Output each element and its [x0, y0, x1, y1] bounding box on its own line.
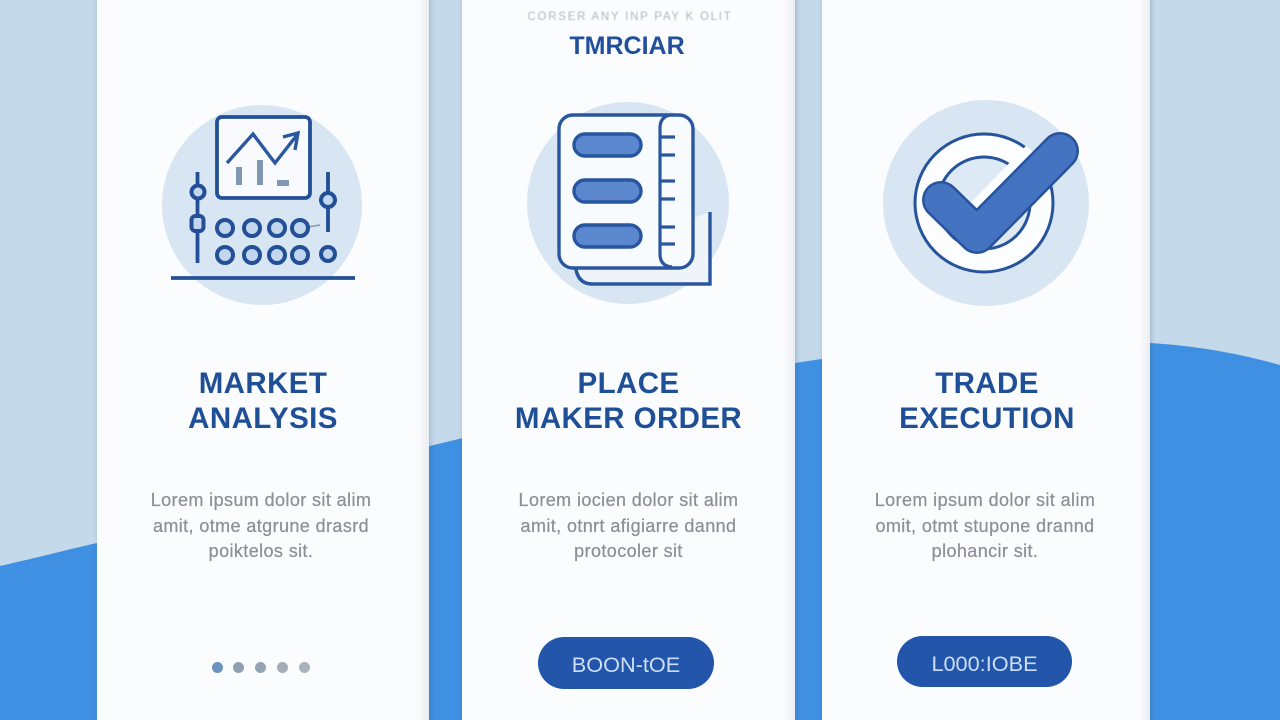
text: market analysis description	[151, 490, 371, 562]
text: place order description	[519, 490, 738, 562]
slider and dial knobs	[192, 186, 335, 263]
text: place order description: Lorem iocien dolor sit alim	[519, 490, 738, 510]
heading: trade execution	[899, 367, 1075, 435]
ruler edge	[660, 115, 672, 267]
panel: market analysis	[97, 0, 429, 720]
button: trade execution	[897, 636, 1072, 687]
text: trade execution description: Lorem ipsum dolor sit alim	[875, 490, 1095, 510]
heading: trade execution: TRADE	[935, 367, 1039, 400]
heading: place maker order: PLACE	[578, 367, 679, 400]
icon: order document	[527, 102, 729, 304]
text: trade execution description	[875, 490, 1095, 562]
button: place order	[538, 637, 714, 689]
panel: trade execution	[822, 0, 1150, 720]
icon background circle	[527, 102, 729, 304]
pagination dots	[212, 662, 310, 673]
baseline	[171, 276, 355, 280]
icon: check mark	[883, 100, 1089, 306]
text: place order description: protocoler sit	[574, 541, 683, 561]
inner disc	[938, 157, 1030, 249]
text: trade execution description: omit, otmt stupone drannd	[875, 516, 1095, 536]
button: place order: BOON-tOE	[572, 652, 680, 677]
check mark fill	[941, 151, 1060, 235]
heading: trade execution: EXECUTION	[899, 402, 1075, 435]
heading: market analysis: MARKET	[199, 367, 327, 400]
ring gap beside check	[971, 146, 1032, 208]
chart bars	[236, 160, 289, 186]
text: market analysis description: amit, otme atgrune drasrd	[153, 516, 369, 536]
check mark outline	[941, 151, 1060, 235]
text: market analysis description: Lorem ipsum dolor sit alim	[151, 490, 371, 510]
panel: place maker order	[462, 0, 795, 720]
text: place order description: amit, otnrt afigiarre dannd	[521, 516, 736, 536]
heading: place maker order: MAKER ORDER	[515, 402, 742, 435]
button: trade execution: L000:IOBE	[931, 651, 1038, 676]
heading: place maker order	[515, 367, 742, 435]
list pills	[574, 134, 641, 247]
trend line with arrow	[227, 133, 298, 163]
sliders	[198, 172, 328, 263]
back sheet	[575, 212, 710, 284]
icon background circle	[162, 105, 362, 305]
text: trade execution description: plohancir sit.	[932, 541, 1038, 561]
chart frame	[217, 117, 310, 198]
front sheet	[559, 115, 693, 268]
top title: TMRCIAR	[569, 32, 685, 60]
text: market analysis description: poiktelos sit.	[209, 541, 313, 561]
top small caption: CORSER ANY INP PAY K OLIT	[527, 11, 733, 23]
heading: market analysis: ANALYSIS	[188, 402, 338, 435]
icon: market chart and dials	[162, 105, 362, 305]
icon background circle	[883, 100, 1089, 306]
heading: market analysis	[188, 367, 338, 435]
outer ring	[915, 134, 1053, 272]
